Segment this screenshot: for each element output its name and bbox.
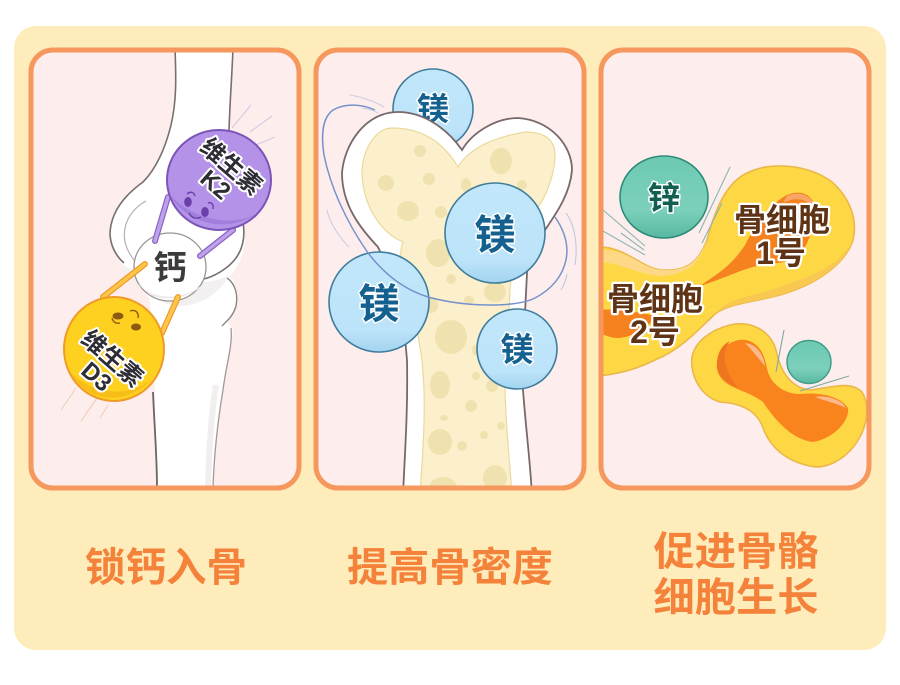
zinc ball: large: 锌	[648, 180, 680, 216]
magnesium ball: top	[393, 69, 473, 149]
zinc ball: large	[620, 156, 708, 238]
label: bone cell 2: 2号	[630, 314, 680, 350]
character: vitamin K2	[155, 130, 271, 256]
calcium ball: 钙	[154, 249, 186, 286]
magnesium ball: middle: 镁	[474, 212, 516, 258]
caption: bone cell growth: 细胞生长	[654, 576, 818, 620]
magnesium ball: left	[329, 252, 429, 352]
panel: promote bone cell growth	[595, 50, 869, 488]
magnesium ball: left: 镁	[358, 281, 400, 327]
label: D3	[76, 357, 117, 397]
motion lines: K2	[232, 105, 275, 145]
zinc ball: small	[787, 340, 831, 384]
caption: bone cell growth	[654, 530, 818, 620]
label: K2	[195, 165, 236, 205]
caption: lock calcium: 锁钙入骨	[85, 546, 247, 590]
arms	[103, 264, 178, 333]
body	[64, 297, 164, 401]
motion lines: small zinc	[776, 330, 849, 391]
illustration: bone cell 1 and 2	[595, 166, 854, 376]
illustration: knee joint bones	[110, 40, 245, 495]
label: bone cell 1: 骨细胞	[734, 202, 830, 238]
nucleus: cell 1	[700, 193, 815, 286]
character: vitamin D3	[60, 264, 178, 411]
calcium ball	[134, 233, 206, 301]
label: bone cell 2: 骨细胞	[607, 281, 703, 317]
motion lines: D3	[61, 388, 108, 421]
caption: bone density: 提高骨密度	[347, 546, 553, 590]
panel: lock calcium into bone	[31, 40, 299, 495]
arms	[155, 197, 233, 256]
body	[167, 130, 271, 230]
orbit swirl lines	[323, 95, 576, 305]
illustration: femur bone	[342, 112, 572, 499]
magnesium ball: middle	[445, 183, 545, 283]
label: bone cell 1	[734, 202, 830, 271]
nucleus: cell 2	[604, 310, 652, 338]
face	[184, 197, 192, 207]
label: 维生素	[195, 133, 267, 201]
face	[112, 312, 124, 320]
illustration: dividing bone cell	[692, 324, 867, 467]
motion lines: large zinc	[603, 167, 730, 255]
panel: improve bone density	[316, 50, 584, 499]
label: bone cell 2	[607, 281, 703, 350]
caption: bone cell growth: 促进骨骼	[654, 530, 818, 574]
magnesium ball: right: 镁	[500, 331, 534, 368]
label: 维生素	[76, 325, 148, 393]
magnesium ball: top: 镁	[417, 91, 449, 127]
magnesium ball: right	[477, 309, 557, 389]
label: bone cell 1: 1号	[756, 235, 806, 271]
bone pores	[378, 145, 527, 499]
